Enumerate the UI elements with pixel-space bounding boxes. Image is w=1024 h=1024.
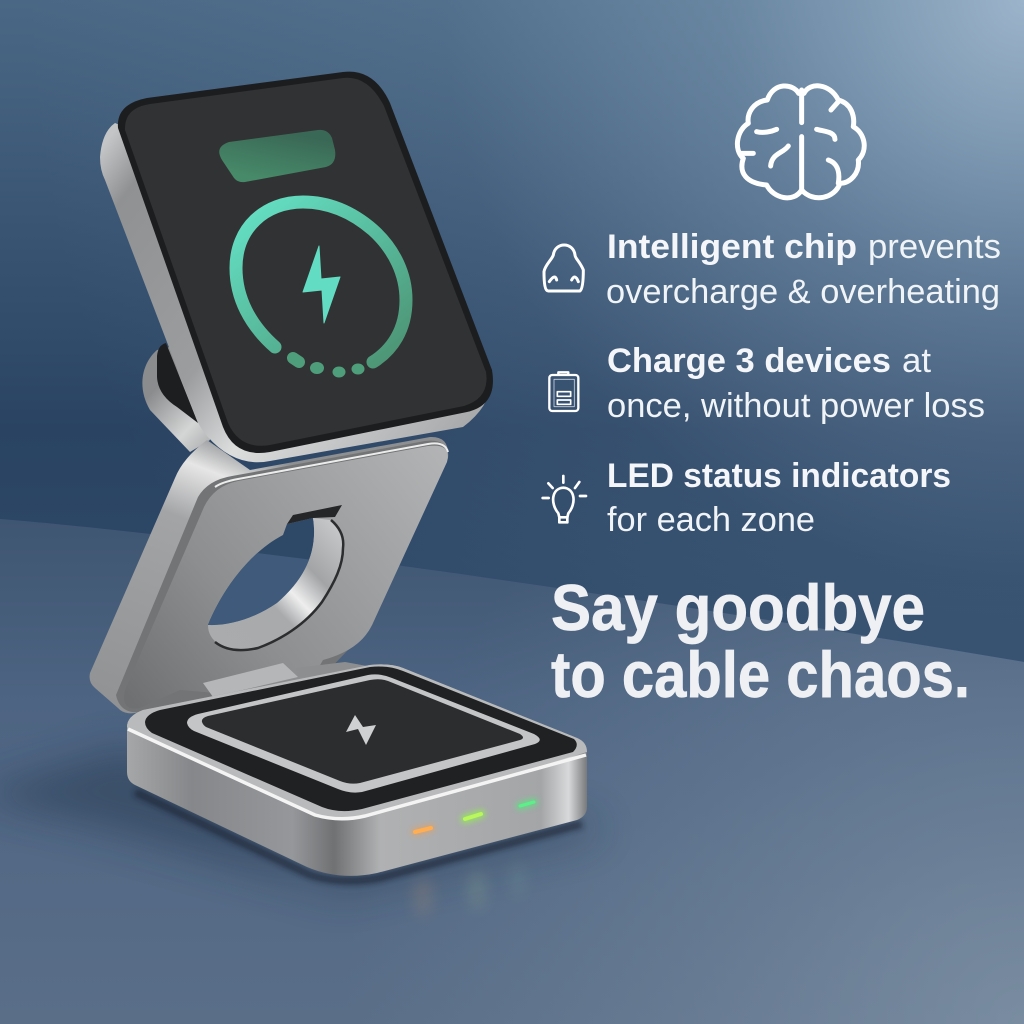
- base body: [127, 664, 587, 876]
- icon: chip: [544, 245, 583, 291]
- watch ring notch: [287, 505, 342, 524]
- icon: charging bolt: [303, 246, 340, 323]
- watch ring inner wall: [208, 518, 342, 651]
- middle panel groove: [116, 441, 447, 712]
- feature: charge 3 devices: at: [902, 342, 932, 380]
- feature: charge 3 devices: [607, 342, 985, 425]
- feature: charge 3 devices: once, without power loss: [607, 387, 985, 425]
- hinge barrel: [142, 340, 210, 452]
- charging pad ring: [187, 674, 540, 793]
- watch ring opening: [208, 518, 314, 625]
- feature: intelligent chip: Intelligent chip: [607, 228, 857, 266]
- feature: intelligent chip: overcharge & overheating: [606, 273, 1000, 311]
- LED indicators: [413, 802, 534, 917]
- feature: LED status indicators: for each zone: [607, 501, 815, 539]
- middle panel back edge: [90, 437, 448, 713]
- middle panel with watch ring: [90, 437, 448, 713]
- icon: light bulb: [543, 476, 586, 522]
- feature: intelligent chip: [606, 228, 1001, 311]
- feature: charge 3 devices: Charge 3 devices: [607, 342, 891, 380]
- folding tab: [203, 663, 298, 697]
- middle panel face: [124, 446, 448, 709]
- icon: brain: [737, 86, 864, 198]
- ring dots: [293, 358, 364, 378]
- icon: battery: [549, 372, 578, 411]
- feature: LED status indicators: LED status indicators: [607, 457, 951, 495]
- charging stand: [90, 72, 587, 917]
- top panel black face: [118, 72, 493, 453]
- base: [127, 664, 587, 917]
- top panel silver frame: [100, 123, 490, 462]
- base black top: [145, 666, 577, 811]
- icon: pad bolt: [346, 715, 376, 745]
- display pill: [219, 130, 335, 182]
- feature: intelligent chip: prevents: [868, 228, 1001, 266]
- base top rim: [127, 664, 587, 820]
- charging pad surface: [202, 679, 523, 784]
- top panel: [100, 72, 493, 462]
- headline: to cable chaos.: [551, 638, 970, 711]
- shadow under charger: [0, 745, 600, 895]
- headline: [551, 571, 970, 711]
- feature: LED status indicators: [607, 457, 951, 539]
- charging ring: [236, 202, 406, 362]
- headline: Say goodbye: [551, 571, 925, 644]
